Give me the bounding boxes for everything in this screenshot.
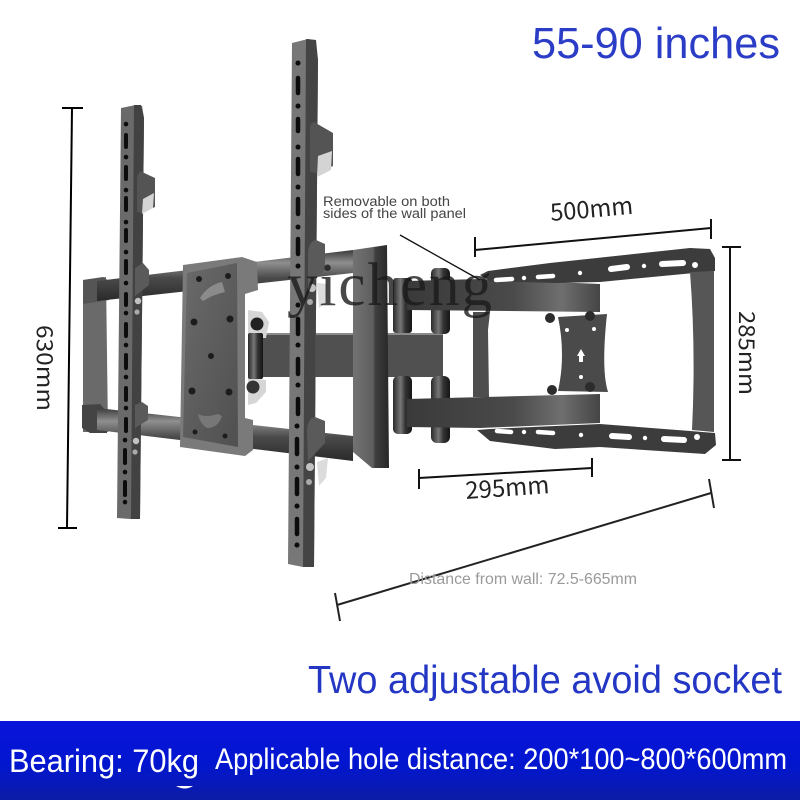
center plate [180,257,258,456]
dimension: 285mm height [722,247,764,460]
dimension: 630mm height: 630mm [30,325,62,411]
dimension: 630mm height [30,108,83,528]
right side frame [353,245,389,468]
upper arm [407,279,600,312]
lower horizontal tube [97,408,353,461]
dimension: 500mm width: 500mm [549,186,634,228]
dimension: distance from wall: Distance from wall: 72.5-665mm [409,571,637,588]
dimension: 285mm height: 285mm [732,311,764,395]
subheading: socket: Two adjustable avoid socket [308,659,782,702]
mount: extending arm assembly [393,248,716,454]
small VESA plate with arrow [545,311,608,395]
upper horizontal tube [97,250,353,301]
dimension: 295mm width: 295mm [464,465,550,506]
top plate [480,248,715,283]
left rail hooks [132,171,155,455]
footer bar [0,721,800,800]
dimension: 295mm width [419,458,592,506]
arm hinge [246,310,269,405]
lower arm [407,394,600,428]
left side frame [83,277,108,432]
small left vertical strut [473,312,490,397]
dimension: distance from wall [335,479,714,621]
swing arm [263,333,443,377]
pivot cylinders [393,268,450,443]
mount: wall plate assembly [82,39,443,567]
dimension: 500mm width [475,186,711,257]
heading: screen size: 55-90 inches [532,19,780,68]
bottom plate [477,424,716,454]
footer: bearing: Bearing: 70kg [9,743,199,779]
callout: removable wall panel: Removable on both [323,194,450,209]
right vertical rail [288,39,318,567]
watermark: yicheng [287,252,492,319]
callout: removable wall panel: sides of the wall panel [323,206,466,221]
callout: removable wall panel [323,194,480,280]
right rail hooks [306,122,333,486]
right vertical frame bar [690,271,714,432]
left vertical rail [117,105,144,519]
